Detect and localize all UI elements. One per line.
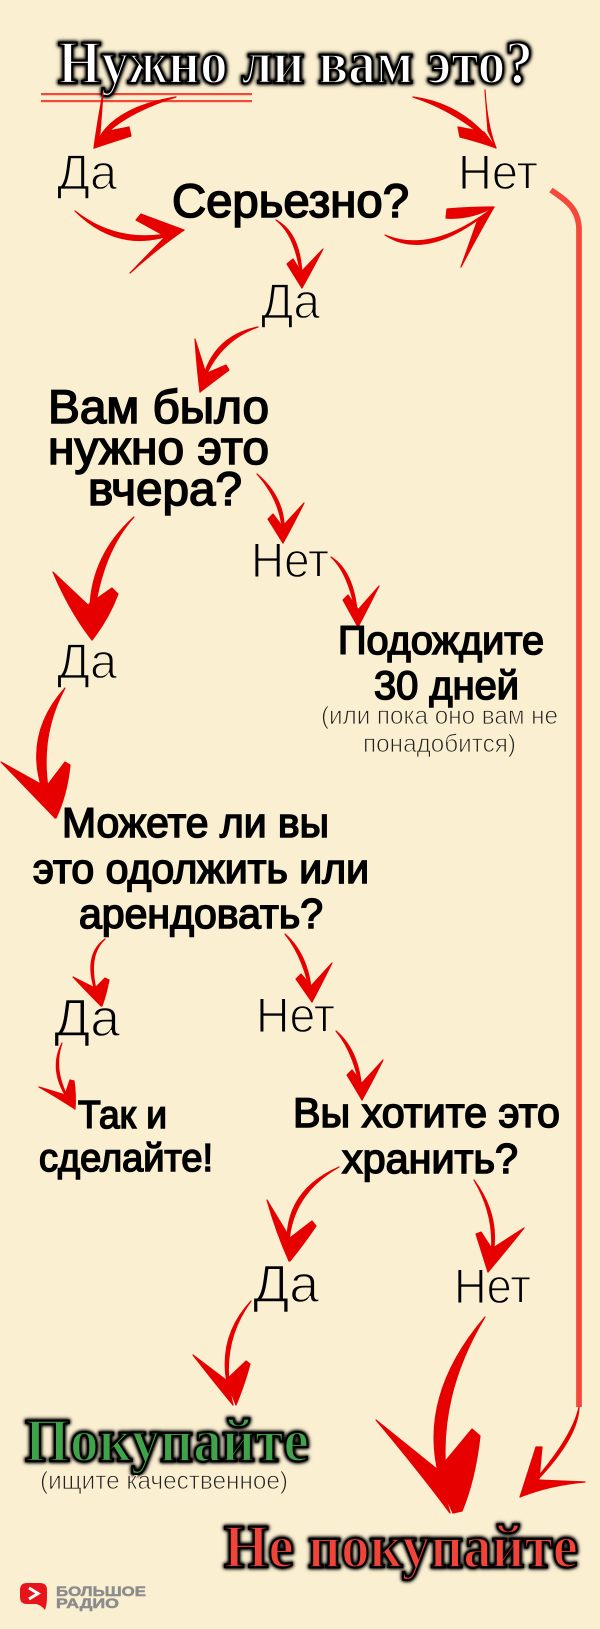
arrow: Нет to Подождите — [331, 557, 379, 627]
arrow: Серьезно to Да — [276, 220, 323, 288]
note: или пока оно вам не понадобится — [321, 702, 558, 758]
answer: Да: Да — [253, 1255, 320, 1314]
arrow: Серьезно to Нет — [385, 207, 494, 267]
answer: Нет: Нет — [251, 534, 329, 588]
answer: Да: Да — [57, 635, 118, 689]
answer: Нет: Нет — [454, 1260, 531, 1314]
question: Вам было нужно это вчера: Вам было — [48, 380, 269, 433]
arrow: хранить to Да — [267, 1167, 339, 1261]
title underline — [41, 93, 252, 102]
arrow: вчера to Нет — [257, 474, 304, 543]
connector: long red line to final answer — [551, 190, 579, 1407]
arrow: арендовать to Нет — [285, 934, 332, 1002]
logo text: РАДИО — [56, 1595, 119, 1611]
question: Вам было нужно это вчера: вчера? — [88, 462, 242, 515]
arrow: Да to Покупайте — [193, 1301, 251, 1405]
answer: Да: Да — [54, 989, 121, 1048]
arrow: title to Нет — [413, 90, 496, 148]
title: Нужно ли вам это? — [58, 30, 533, 97]
arrow: title to Да — [94, 93, 176, 148]
result: Подождите 30 дней: Подождите — [338, 619, 544, 663]
question: Можете ли вы это одолжить или арендовать: Можете ли вы — [62, 799, 329, 846]
question: Вам было нужно это вчера: нужно это — [48, 421, 269, 474]
arrow: хранить to Нет — [474, 1180, 524, 1272]
arrow: арендовать to Да — [73, 939, 109, 1006]
arrow: вчера to Да — [53, 517, 134, 640]
note: или пока оно вам не понадобится: (или пока оно вам не — [321, 702, 558, 730]
arrow: Да to Серьезно — [75, 211, 184, 273]
icon: speech bubble — [20, 1583, 47, 1610]
question: Серьезно: Серьезно? — [172, 174, 409, 227]
answer: Нет: Нет — [458, 146, 538, 200]
question: Вы хотите это хранить: хранить? — [342, 1135, 518, 1182]
note: или пока оно вам не понадобится: понадобится) — [363, 730, 516, 758]
logo text: БОЛЬШОЕ — [56, 1583, 146, 1599]
arrow: Нет to Вы хотите — [336, 1031, 383, 1100]
question: Можете ли вы это одолжить или арендовать — [33, 799, 369, 937]
logo text — [56, 1583, 146, 1611]
result: Покупайте: Покупайте — [25, 1408, 309, 1475]
question: Вам было нужно это вчера — [48, 380, 269, 515]
arrow: Да to Вам было — [195, 327, 258, 392]
result: Так и сделайте — [39, 1094, 213, 1180]
answer: Да: Да — [57, 146, 118, 200]
answer: Да: Да — [261, 275, 321, 329]
result: Так и сделайте: сделайте! — [39, 1137, 213, 1180]
question: Можете ли вы это одолжить или арендовать: арендовать? — [79, 890, 323, 937]
result: Так и сделайте: Так и — [78, 1094, 167, 1137]
question: Можете ли вы это одолжить или арендовать: это одолжить или — [33, 845, 369, 892]
arrow: Да to Можете — [1, 688, 70, 818]
result: Подождите 30 дней — [321, 619, 558, 758]
question: Вы хотите это хранить: Вы хотите это — [293, 1089, 560, 1136]
result: Подождите 30 дней: 30 дней — [374, 664, 519, 708]
question: Вы хотите это хранить — [293, 1089, 560, 1182]
arrow: Нет to Не покупайте — [376, 1317, 485, 1513]
result: Не покупайте: Не покупайте — [224, 1514, 578, 1581]
logo: Большое Радио — [20, 1583, 146, 1611]
answer: Нет: Нет — [256, 989, 335, 1043]
arrow: red line to Не покупайте — [520, 1407, 585, 1497]
note: ищите качественное: (ищите качественное) — [40, 1467, 288, 1495]
arrow: Да to Так и сделайте — [39, 1043, 75, 1109]
